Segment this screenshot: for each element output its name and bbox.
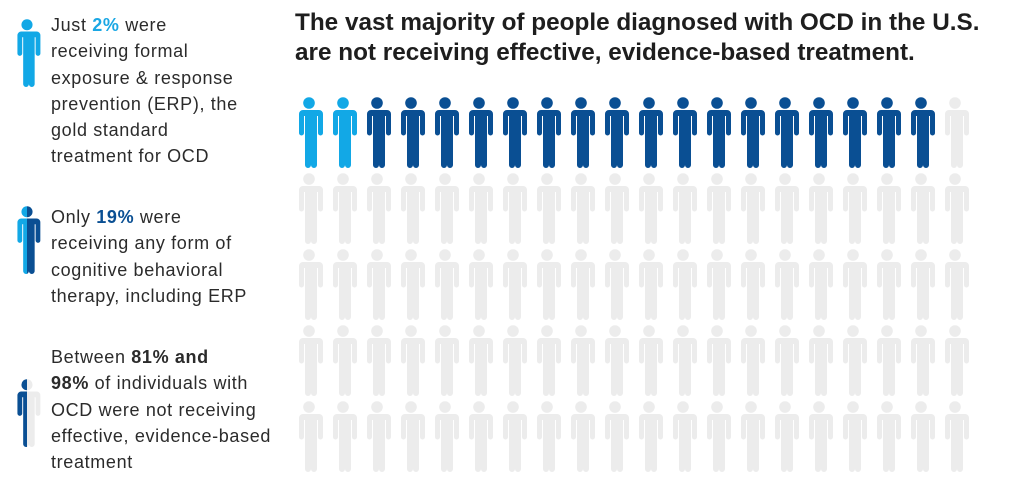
text: 19% CBT: receiving any form of xyxy=(51,233,232,253)
text: 2% ERP: prevention (ERP), the xyxy=(51,94,238,114)
text: 19% CBT: Only 19% were xyxy=(51,207,182,227)
text: 81-98%: 98% of individuals with xyxy=(51,373,248,393)
title: are not receiving effective, evidence-based treatment. xyxy=(295,39,915,66)
text: 19% CBT xyxy=(51,207,247,306)
text: 2% ERP: gold standard xyxy=(51,120,169,140)
text: 19% CBT: therapy, including ERP xyxy=(51,286,247,306)
text: 81-98%: treatment xyxy=(51,452,133,472)
pictogram grid xyxy=(299,97,969,472)
text: 81-98%: OCD were not receiving xyxy=(51,400,256,420)
text: 2% ERP: receiving formal xyxy=(51,41,188,61)
title: The vast majority of people diagnosed with OCD in the U.S. xyxy=(295,9,979,36)
text: 2% ERP xyxy=(51,15,238,166)
icon: half dark half gray person xyxy=(17,379,40,447)
text: 81-98%: Between 81% and xyxy=(51,347,209,367)
text: 81-98%: effective, evidence-based xyxy=(51,426,271,446)
text: 81-98% xyxy=(51,347,271,472)
text: 2% ERP: Just 2% were xyxy=(51,15,167,35)
text: 2% ERP: treatment for OCD xyxy=(51,146,209,166)
text: 2% ERP: exposure & response xyxy=(51,68,233,88)
text: 19% CBT: cognitive behavioral xyxy=(51,260,223,280)
icon: half light half dark person xyxy=(17,206,40,274)
icon: light blue person xyxy=(17,19,40,87)
title xyxy=(295,9,979,66)
